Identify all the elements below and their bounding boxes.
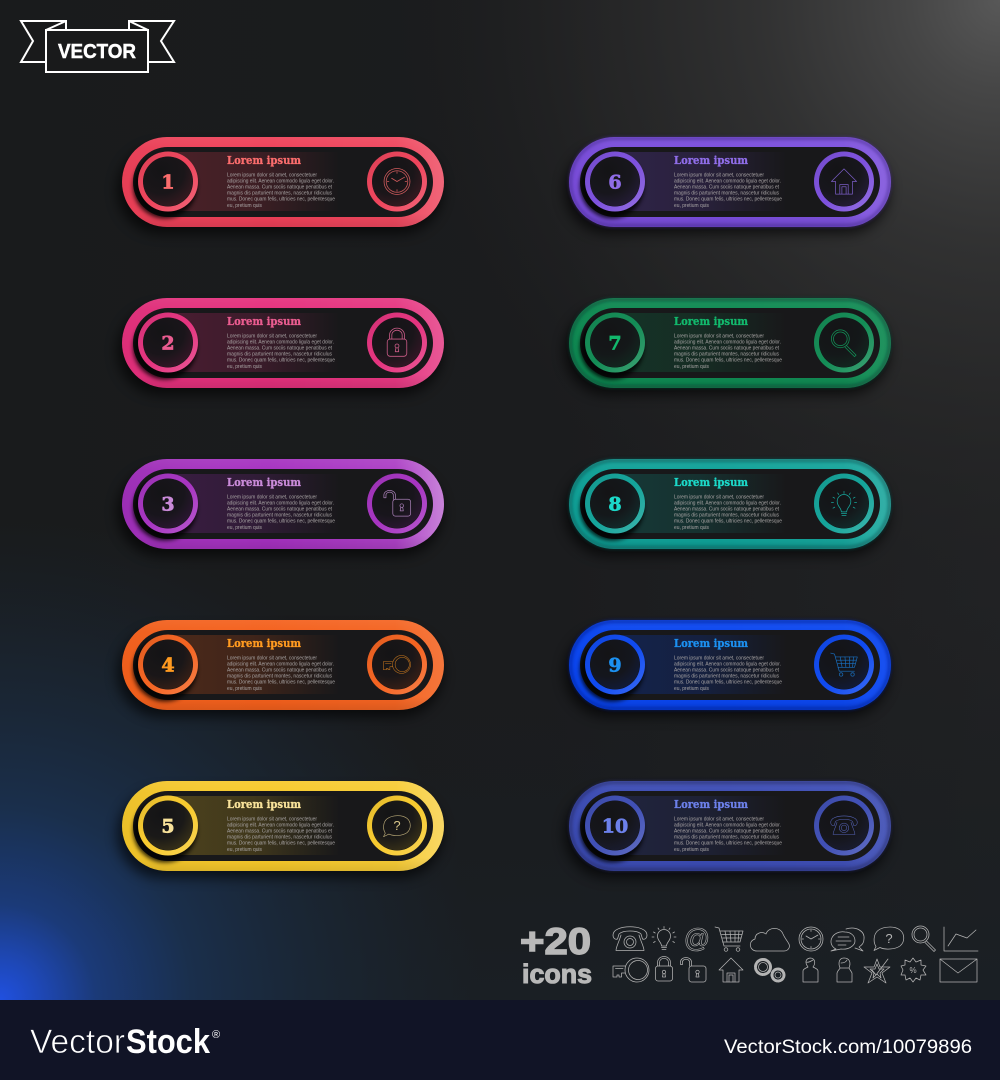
- pill frame: [564, 620, 891, 717]
- icon: lock: [367, 312, 427, 372]
- number badge: 2: [161, 332, 175, 354]
- heading: Lorem ipsum: [674, 475, 748, 489]
- pill frame: [564, 459, 891, 556]
- body text: adipiscing elit. Aenean commodo ligula eget dolor.: [227, 500, 334, 506]
- body text: [674, 816, 782, 853]
- heading: Lorem ipsum: [227, 314, 301, 328]
- pill frame: [117, 781, 444, 878]
- body text: Aenean massa. Cum sociis natoque penatibus et: [227, 668, 333, 674]
- logo: VectorStock: Vector: [30, 1023, 125, 1061]
- body text: magnis dis parturient montes, nascetur ridiculus: [674, 191, 779, 197]
- number badge: [133, 152, 198, 218]
- number badge: 8: [608, 494, 622, 516]
- icon: clock: [799, 927, 823, 951]
- number badge: [580, 312, 645, 380]
- body text: adipiscing elit. Aenean commodo ligula eget dolor.: [674, 339, 781, 345]
- icon: light bulb: [652, 926, 676, 950]
- body text: Aenean massa. Cum sociis natoque penatibus et: [227, 828, 333, 834]
- heading: +20 icons: +20: [520, 921, 591, 962]
- logo: VectorStock: ®: [212, 1029, 220, 1041]
- panel: item 10: [564, 781, 891, 878]
- body text: Aenean massa. Cum sociis natoque penatibus et: [227, 506, 333, 512]
- body text: adipiscing elit. Aenean commodo ligula eget dolor.: [227, 339, 334, 345]
- body text: Lorem ipsum dolor sit amet, consectetuer: [227, 494, 317, 500]
- icon: key: [613, 958, 649, 982]
- body text: Lorem ipsum dolor sit amet, consectetuer: [674, 172, 764, 178]
- panel: item 5: [117, 781, 444, 878]
- number badge: 10: [602, 816, 628, 838]
- body text: Aenean massa. Cum sociis natoque penatibus et: [674, 346, 780, 352]
- body text: Aenean massa. Cum sociis natoque penatibus et: [674, 668, 780, 674]
- icon: telephone: [613, 927, 647, 950]
- body text: [227, 816, 335, 853]
- heading: Lorem ipsum: [227, 475, 301, 489]
- icon: light bulb: [814, 474, 874, 534]
- body text: [674, 494, 782, 531]
- icon: envelope: [940, 959, 977, 982]
- body text: mus. Donec quam felis, ultricies nec, pellentesque: [227, 358, 335, 364]
- body text: [227, 655, 335, 692]
- body text: mus. Donec quam felis, ultricies nec, pellentesque: [674, 841, 782, 847]
- pill frame: [117, 298, 444, 395]
- body text: eu, pretium quis: [674, 686, 709, 692]
- icon: magnifier: [814, 312, 874, 372]
- body text: eu, pretium quis: [227, 686, 262, 692]
- icon: open lock: [680, 958, 706, 982]
- logo: VectorStock: [30, 1023, 220, 1061]
- body text: mus. Donec quam felis, ultricies nec, pellentesque: [674, 519, 782, 525]
- icon: cloud: [750, 928, 789, 951]
- body text: adipiscing elit. Aenean commodo ligula eget dolor.: [674, 500, 781, 506]
- panel: item 2: [117, 298, 444, 395]
- body text: Aenean massa. Cum sociis natoque penatibus et: [227, 184, 333, 190]
- body text: magnis dis parturient montes, nascetur ridiculus: [227, 674, 332, 680]
- panel: item 3: [117, 459, 444, 556]
- number badge: 4: [161, 654, 175, 676]
- body text: eu, pretium quis: [227, 525, 262, 531]
- body text: magnis dis parturient montes, nascetur ridiculus: [227, 191, 332, 197]
- panel: item 8: [564, 459, 891, 556]
- number badge: [580, 796, 645, 862]
- heading: Lorem ipsum: [674, 797, 748, 811]
- body text: mus. Donec quam felis, ultricies nec, pellentesque: [227, 841, 335, 847]
- icon: house: [719, 958, 743, 982]
- body text: mus. Donec quam felis, ultricies nec, pellentesque: [227, 680, 335, 686]
- icon: lock: [656, 956, 672, 981]
- body text: Aenean massa. Cum sociis natoque penatibus et: [674, 184, 780, 190]
- icon: shopping cart: [814, 634, 874, 694]
- icon: chat bubbles: [831, 928, 864, 951]
- icon: telephone: [814, 796, 874, 856]
- body text: Aenean massa. Cum sociis natoque penatibus et: [674, 828, 780, 834]
- heading: +20 icons: [520, 921, 592, 989]
- body text: Aenean massa. Cum sociis natoque penatibus et: [674, 506, 780, 512]
- body text: magnis dis parturient montes, nascetur ridiculus: [674, 674, 779, 680]
- body text: magnis dis parturient montes, nascetur ridiculus: [227, 835, 332, 841]
- heading: +20 icons: icons: [522, 959, 592, 989]
- icon: question bubble: ?: [393, 818, 401, 833]
- panel: item 9: [564, 620, 891, 717]
- body text: eu, pretium quis: [227, 203, 262, 209]
- body text: eu, pretium quis: [227, 847, 262, 853]
- icon set: [613, 923, 978, 983]
- body text: Lorem ipsum dolor sit amet, consectetuer: [674, 333, 764, 339]
- body text: adipiscing elit. Aenean commodo ligula eget dolor.: [227, 822, 334, 828]
- number badge: [580, 474, 645, 540]
- number badge: 7: [608, 332, 622, 354]
- body text: eu, pretium quis: [674, 525, 709, 531]
- icon: question bubble: [367, 796, 427, 856]
- heading: Lorem ipsum: [674, 636, 748, 650]
- panel: item 7: [564, 298, 891, 395]
- body text: mus. Donec quam felis, ultricies nec, pellentesque: [674, 680, 782, 686]
- body text: [674, 333, 782, 370]
- badge: vector ribbon: VECTOR: [58, 41, 137, 63]
- logo: VectorStock: Stock: [126, 1023, 210, 1061]
- body text: Lorem ipsum dolor sit amet, consectetuer: [674, 494, 764, 500]
- icon: woman: [837, 958, 852, 982]
- body text: mus. Donec quam felis, ultricies nec, pellentesque: [674, 358, 782, 364]
- body text: magnis dis parturient montes, nascetur ridiculus: [674, 352, 779, 358]
- body text: eu, pretium quis: [674, 847, 709, 853]
- pill frame: [117, 137, 444, 234]
- number badge: [133, 796, 198, 862]
- body text: Lorem ipsum dolor sit amet, consectetuer: [674, 816, 764, 822]
- icon: question bubble: ?: [885, 931, 893, 946]
- number badge: 5: [161, 816, 175, 838]
- pill frame: [117, 459, 444, 556]
- body text: adipiscing elit. Aenean commodo ligula eget dolor.: [674, 661, 781, 667]
- footer bar: [0, 1000, 1000, 1080]
- body text: mus. Donec quam felis, ultricies nec, pellentesque: [227, 519, 335, 525]
- body text: adipiscing elit. Aenean commodo ligula eget dolor.: [227, 661, 334, 667]
- image id: VectorStock.com/10079896: [724, 1037, 972, 1058]
- icon: at sign: @: [684, 923, 710, 953]
- body text: Lorem ipsum dolor sit amet, consectetuer: [227, 333, 317, 339]
- icon: discount badge: %: [909, 966, 917, 975]
- icon: man: [803, 958, 818, 982]
- number badge: [580, 634, 645, 702]
- body text: mus. Donec quam felis, ultricies nec, pellentesque: [674, 197, 782, 203]
- body text: Lorem ipsum dolor sit amet, consectetuer: [227, 816, 317, 822]
- body text: magnis dis parturient montes, nascetur ridiculus: [227, 513, 332, 519]
- body text: [227, 172, 335, 209]
- panel: item 6: [564, 137, 891, 234]
- body text: magnis dis parturient montes, nascetur ridiculus: [674, 835, 779, 841]
- heading: Lorem ipsum: [674, 153, 748, 167]
- pill frame: [564, 298, 891, 395]
- badge: vector ribbon: [21, 21, 174, 72]
- icon: cart: [715, 927, 743, 951]
- pill frame: [564, 781, 891, 878]
- icon: magnifier: [912, 926, 936, 952]
- icon: house: [814, 152, 874, 212]
- number badge: [133, 312, 198, 380]
- icon: gears: [756, 960, 784, 981]
- body text: mus. Donec quam felis, ultricies nec, pellentesque: [227, 197, 335, 203]
- heading: Lorem ipsum: [227, 797, 301, 811]
- icon: key: [367, 634, 427, 694]
- body text: Aenean massa. Cum sociis natoque penatibus et: [227, 346, 333, 352]
- pill frame: [117, 620, 444, 717]
- number badge: 9: [608, 654, 622, 676]
- icon: clock: [367, 152, 427, 212]
- body text: eu, pretium quis: [674, 203, 709, 209]
- number badge: [133, 634, 198, 702]
- body text: adipiscing elit. Aenean commodo ligula eget dolor.: [674, 822, 781, 828]
- number badge: 1: [161, 172, 175, 194]
- body text: [227, 333, 335, 370]
- body text: adipiscing elit. Aenean commodo ligula eget dolor.: [674, 178, 781, 184]
- icon: star badge: [864, 959, 890, 983]
- body text: [674, 172, 782, 209]
- icon: question bubble: [874, 927, 904, 950]
- body text: Lorem ipsum dolor sit amet, consectetuer: [227, 655, 317, 661]
- body text: [674, 655, 782, 692]
- body text: eu, pretium quis: [674, 364, 709, 370]
- pill frame: [564, 137, 891, 234]
- body text: magnis dis parturient montes, nascetur ridiculus: [227, 352, 332, 358]
- body text: adipiscing elit. Aenean commodo ligula eget dolor.: [227, 178, 334, 184]
- icon: open lock: [367, 474, 427, 534]
- panel: item 1: [117, 137, 444, 234]
- body text: Lorem ipsum dolor sit amet, consectetuer: [674, 655, 764, 661]
- body text: eu, pretium quis: [227, 364, 262, 370]
- number badge: [580, 152, 645, 218]
- heading: Lorem ipsum: [674, 314, 748, 328]
- panel: item 4: [117, 620, 444, 717]
- heading: Lorem ipsum: [227, 636, 301, 650]
- heading: Lorem ipsum: [227, 153, 301, 167]
- number badge: [133, 474, 198, 540]
- body text: magnis dis parturient montes, nascetur ridiculus: [674, 513, 779, 519]
- number badge: 3: [161, 494, 175, 516]
- icon: discount badge: [901, 958, 926, 982]
- number badge: 6: [608, 172, 622, 194]
- body text: Lorem ipsum dolor sit amet, consectetuer: [227, 172, 317, 178]
- icon: line chart: [944, 927, 978, 951]
- body text: [227, 494, 335, 531]
